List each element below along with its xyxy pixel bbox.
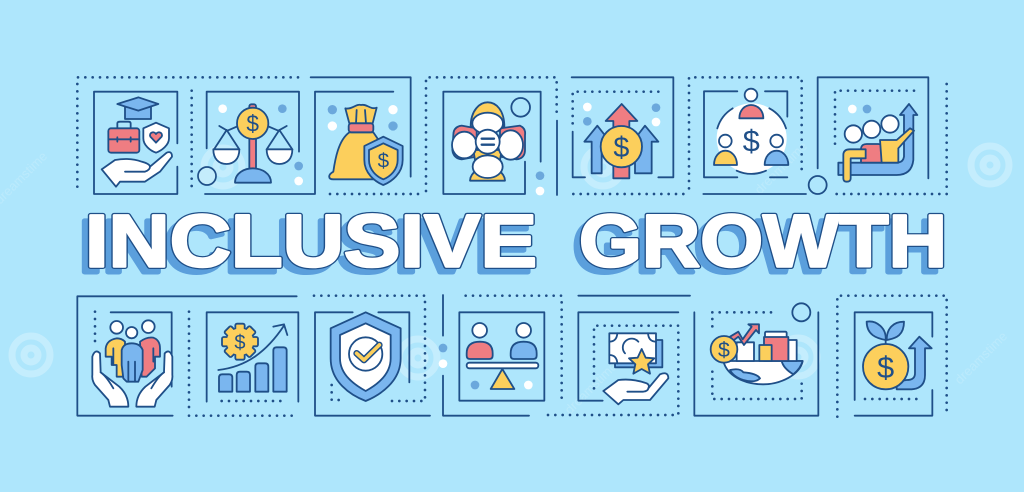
icon: balance scale with dollar: $ [246, 110, 259, 136]
bottom row frames, right [694, 296, 947, 417]
decorative color dots, top middle [536, 103, 660, 195]
icon: plant coin with rising arrow [863, 321, 932, 389]
icon: people on rising arrow [838, 104, 917, 182]
icon: diverse people clover with equals sign [452, 102, 525, 181]
icon: equal balance between two people [467, 323, 538, 389]
watermark spirals [12, 146, 1009, 377]
icon: people around dollar: $ [743, 124, 760, 158]
title: Inclusive Growth: INCLUSIVE [79, 205, 531, 288]
icon: money bag with shield: $ [378, 149, 390, 172]
title: Inclusive Growth: GROWTH [573, 205, 941, 288]
watermark text [0, 138, 1010, 417]
icon: hands holding people [92, 320, 172, 407]
bottom row frames, left [77, 296, 430, 416]
title: Inclusive Growth: GROWTH [579, 200, 947, 282]
title: Inclusive Growth: INCLUSIVE [85, 200, 537, 282]
title: Inclusive Growth [79, 200, 947, 288]
watermark text: dreamstime [562, 358, 620, 417]
title: Inclusive Growth: GROWTH [579, 200, 947, 282]
icon: plant coin with rising arrow: $ [877, 351, 894, 385]
bottom row frames, middle [439, 295, 690, 416]
icon: money and star on hand [603, 333, 668, 404]
top row frames, middle [426, 77, 688, 195]
icon: shield with check mark [331, 312, 401, 401]
icon: balance scale with dollar [213, 104, 292, 183]
icon: global economy with coin and goods [711, 324, 803, 384]
watermark text: dreamstime [952, 328, 1010, 387]
decorative color dots, top left [218, 104, 398, 185]
title: Inclusive Growth: INCLUSIVE [85, 200, 537, 282]
decorative coin ring [198, 167, 216, 185]
icon: global economy with coin and goods: $ [718, 338, 730, 362]
icon: rising arrows with dollar coin: $ [613, 132, 629, 164]
watermark text: dreamstime [752, 138, 810, 197]
top row frames and dotted borders, left [77, 77, 423, 194]
icon: money bag with shield [329, 105, 403, 185]
icon: gear and growth chart: $ [234, 332, 246, 354]
icon: people around dollar [714, 89, 788, 174]
top row frames, right [689, 77, 947, 194]
icon: gear and growth chart [218, 324, 287, 392]
icon: career support hand [102, 97, 172, 187]
icon: rising arrows with dollar coin [584, 104, 658, 178]
